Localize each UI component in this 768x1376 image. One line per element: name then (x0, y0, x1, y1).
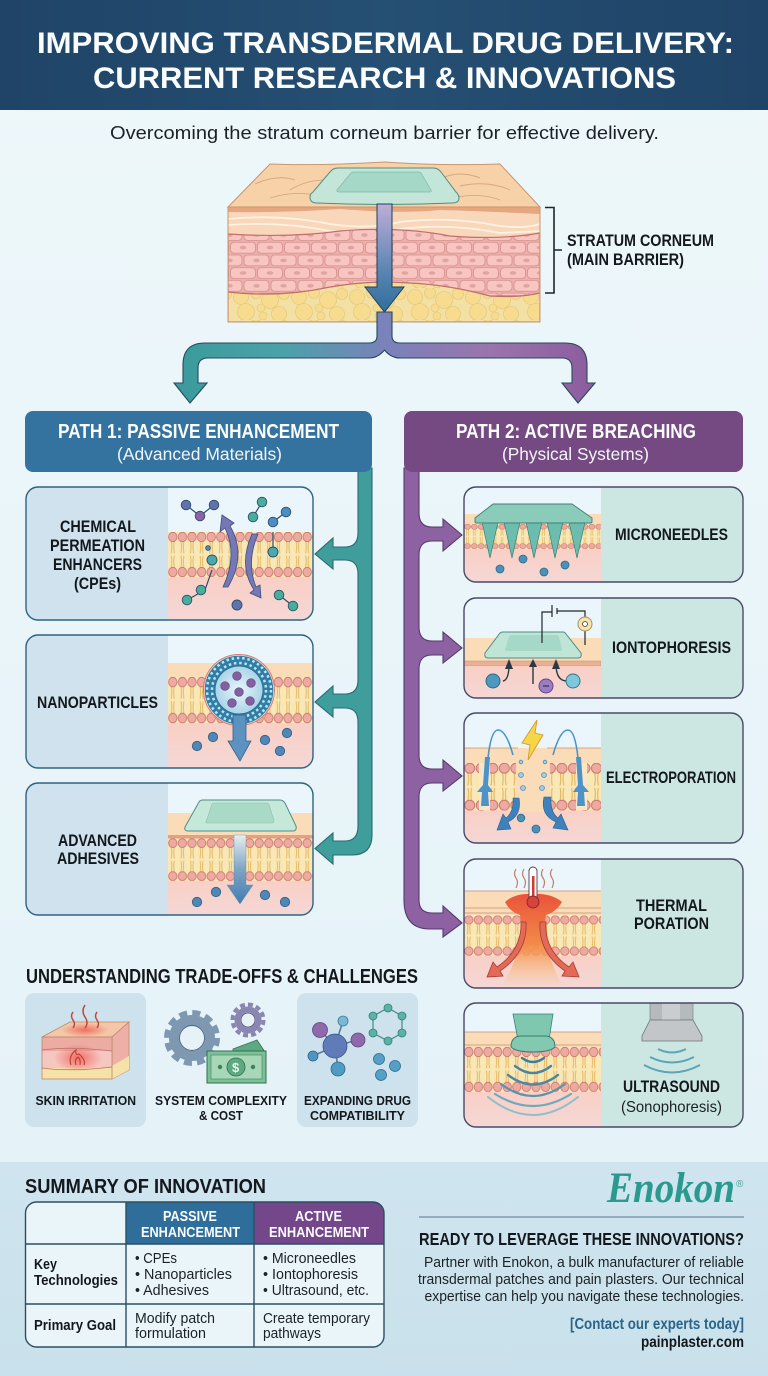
card: expanding drug compatibility: EXPANDING DRUG (304, 1093, 411, 1108)
arrow: passive path bus with branches (315, 468, 372, 864)
card: system complexity and cost (155, 1004, 287, 1123)
illustration: adhesive patch (168, 783, 313, 915)
panel label (634, 897, 709, 933)
row: primary goal: Primary Goal (34, 1318, 116, 1334)
icon: ultrasound probe (642, 1003, 702, 1072)
panel label (50, 518, 145, 593)
card: expanding drug compatibility: COMPATIBILITY (310, 1108, 405, 1123)
row: key technologies (34, 1250, 369, 1299)
call to action: [Contact our experts today] (570, 1316, 744, 1333)
panel label: IONTOPHORESIS (612, 639, 731, 657)
illustration: CPE membrane (168, 487, 313, 620)
arrow: fork into two paths (174, 312, 595, 403)
illustration: thermal poration (464, 859, 601, 988)
row: primary goal: Modify patch (135, 1310, 215, 1327)
illustration: ultrasound on skin (464, 1003, 601, 1127)
title (37, 27, 734, 95)
card: skin irritation (25, 993, 146, 1127)
panel label: CHEMICAL (60, 518, 136, 536)
row: key technologies: • Adhesives (135, 1282, 209, 1299)
panel label: ELECTROPORATION (606, 769, 736, 787)
panel label (57, 832, 139, 868)
arrow: active path bus with branches (404, 468, 462, 937)
panel: thermal poration (464, 859, 743, 988)
call to action: painplaster.com (641, 1334, 744, 1351)
panel label: PORATION (634, 915, 709, 933)
skin cross-section with patch (228, 162, 540, 322)
card: expanding drug compatibility (297, 993, 418, 1127)
table header cells: PASSIVE (163, 1209, 217, 1225)
panel label: MICRONEEDLES (615, 526, 728, 544)
heading: path 1 (25, 411, 372, 472)
title: IMPROVING TRANSDERMAL DRUG DELIVERY: (37, 27, 734, 60)
heading: path 1: (Advanced Materials) (117, 444, 282, 464)
skin surface (228, 162, 540, 207)
call to action (418, 1229, 744, 1351)
panel label: THERMAL (636, 897, 707, 915)
illustration: microneedle array (464, 487, 601, 582)
panel: microneedles (464, 487, 743, 582)
heading: path 2: PATH 2: ACTIVE BREACHING (456, 420, 696, 443)
heading: summary: SUMMARY OF INNOVATION (25, 1175, 266, 1198)
arrow: down through skin (365, 204, 404, 312)
title: CURRENT RESEARCH & INNOVATIONS (93, 62, 676, 95)
row: key technologies: • Microneedles (263, 1250, 356, 1267)
icon: irritated skin block (42, 1005, 129, 1079)
panel label: ADHESIVES (57, 850, 139, 868)
table header cells: ACTIVE (295, 1209, 342, 1225)
row: primary goal: pathways (263, 1325, 321, 1342)
illustration: iontophoresis patch (464, 598, 601, 698)
panel: iontophoresis (464, 598, 743, 698)
heading: path 1: PATH 1: PASSIVE ENHANCEMENT (58, 420, 339, 443)
row: primary goal (34, 1310, 370, 1342)
skin layers (228, 207, 540, 322)
illustration: electroporation (464, 713, 602, 843)
panel label: (CPEs) (74, 575, 121, 593)
row: key technologies: Key (34, 1257, 57, 1273)
bracket and label: stratum corneum (545, 208, 714, 293)
patch (310, 168, 459, 204)
panel: nanoparticles (26, 635, 313, 768)
bracket and label: stratum corneum: STRATUM CORNEUM (567, 232, 714, 250)
row: key technologies: Technologies (34, 1273, 118, 1289)
card: system complexity and cost: SYSTEM COMPLEXITY (155, 1093, 287, 1108)
panel label: ULTRASOUND (623, 1078, 720, 1096)
call to action: transdermal patches and pain plasters. Our technical (418, 1271, 744, 1288)
brand logo: Enokon (606, 1165, 735, 1212)
illustration: nanoparticle (168, 635, 313, 768)
panel label: NANOPARTICLES (37, 694, 158, 712)
panel: chemical permeation enhancers (26, 487, 313, 620)
card: skin irritation: SKIN IRRITATION (36, 1093, 136, 1108)
row: key technologies: • Ultrasound, etc. (263, 1282, 369, 1299)
call to action: Partner with Enokon, a bulk manufacturer of reliable (424, 1254, 744, 1271)
icon: gears and money: $ (232, 1060, 240, 1075)
header banner (0, 0, 768, 110)
row: key technologies: • Iontophoresis (263, 1266, 358, 1283)
panel: ultrasound (464, 1003, 743, 1127)
row: key technologies: • Nanoparticles (135, 1266, 232, 1283)
panel label: (Sonophoresis) (621, 1099, 722, 1116)
table header cells (141, 1209, 369, 1241)
row: key technologies: • CPEs (135, 1250, 177, 1267)
panel: electroporation (464, 713, 743, 843)
icon: molecules (308, 1004, 406, 1080)
subtitle: Overcoming the stratum corneum barrier for effective delivery. (110, 123, 659, 143)
row: primary goal: Create temporary (263, 1310, 370, 1327)
summary table (26, 1202, 384, 1347)
footer band (0, 1162, 768, 1376)
heading: path 2 (404, 411, 743, 472)
panel label: ENHANCERS (53, 556, 142, 574)
panel: advanced adhesives (26, 783, 313, 915)
row: primary goal: formulation (135, 1325, 206, 1342)
call to action: expertise can help you navigate these technologies. (424, 1288, 744, 1305)
heading: path 2: (Physical Systems) (502, 444, 649, 464)
bracket and label: stratum corneum: (MAIN BARRIER) (567, 251, 684, 269)
card: system complexity and cost: & COST (199, 1108, 243, 1123)
heading: trade-offs: UNDERSTANDING TRADE-OFFS & CHALLENGES (26, 966, 418, 988)
table header cells: ENHANCEMENT (269, 1225, 369, 1241)
brand logo: ® (736, 1179, 744, 1190)
panel label: PERMEATION (50, 537, 145, 555)
table header cells: ENHANCEMENT (141, 1225, 240, 1241)
panel label (621, 1078, 722, 1116)
panel label: ADVANCED (58, 832, 137, 850)
